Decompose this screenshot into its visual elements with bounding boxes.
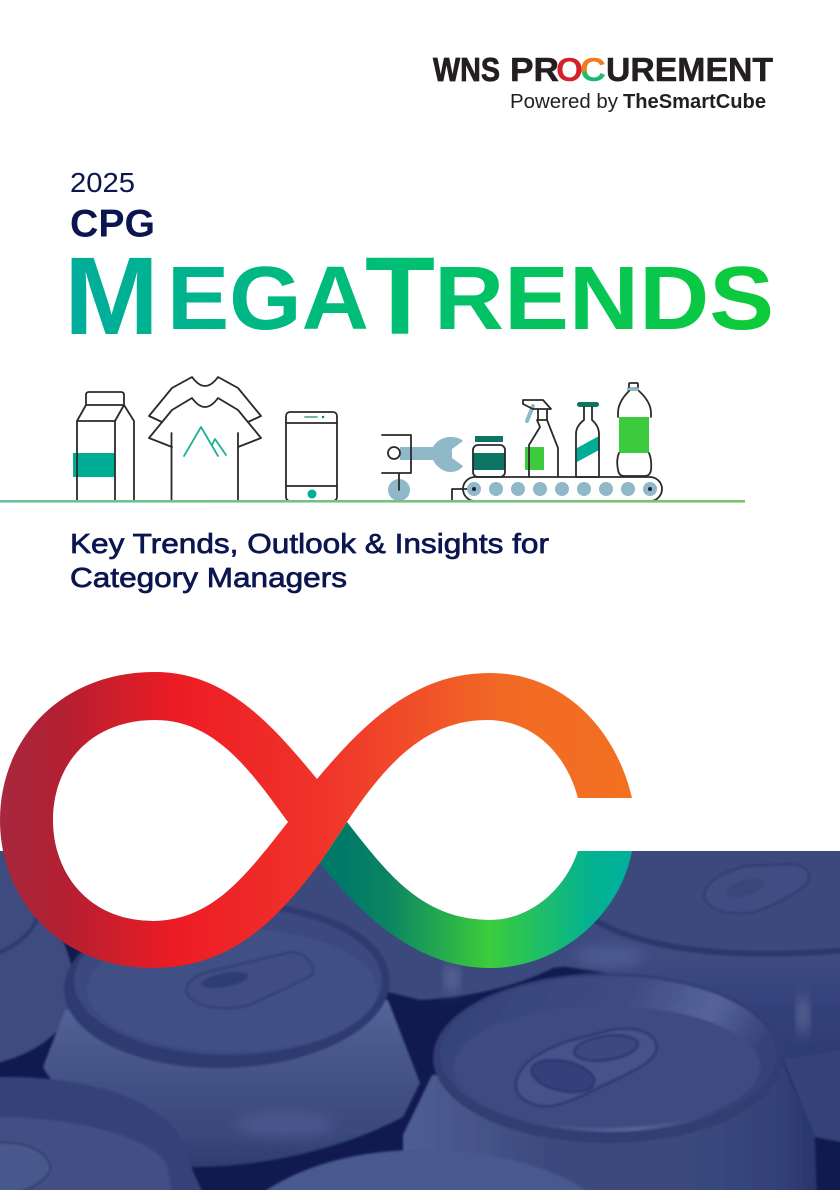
can: top right	[553, 845, 840, 1062]
subtitle: Key Trends, Outlook & Insights for	[70, 528, 549, 559]
heading: CPG: CPG	[70, 202, 155, 246]
icon: glass bottle	[576, 402, 599, 477]
title: MegaTrends: RENDS	[434, 249, 774, 349]
logo tagline: Powered by	[510, 91, 618, 113]
icon: conveyor belt	[452, 477, 662, 501]
ground line	[0, 500, 745, 503]
logo wordmark: WNS	[433, 51, 500, 88]
icon: smartphone	[286, 412, 337, 501]
icon: jar	[473, 436, 505, 477]
illustration: product line	[73, 377, 662, 501]
logo wordmark: C	[580, 51, 606, 88]
icon: t-shirts	[149, 377, 261, 500]
logo: WNS Procurement	[433, 51, 773, 113]
subtitle	[70, 528, 549, 593]
can: centre left	[43, 896, 420, 1167]
icon: milk carton	[73, 392, 134, 500]
icon: spray bottle	[523, 400, 558, 477]
logo tagline: TheSmartCube	[623, 91, 766, 113]
can: large front right	[403, 973, 817, 1190]
icon: plastic bottle	[617, 383, 651, 476]
logo wordmark	[433, 51, 773, 88]
background photo: aluminium cans	[0, 845, 840, 1190]
can: bottom left	[0, 1077, 205, 1190]
can: top left	[0, 845, 76, 1064]
can: bottom centre	[258, 1150, 595, 1190]
logo wordmark: O	[556, 51, 583, 88]
heading: year: 2025	[70, 167, 135, 198]
can: lower right edge	[783, 1049, 840, 1143]
white loop interiors	[53, 720, 632, 921]
title: MegaTrends: M	[64, 235, 159, 358]
can: back centre	[284, 851, 578, 1001]
icon: robot wrench arm	[382, 435, 463, 501]
title: MegaTrends: EGA	[167, 249, 369, 349]
green lower band	[320, 822, 632, 968]
title: MegaTrends: T	[365, 235, 435, 358]
title: MegaTrends	[64, 235, 774, 358]
logo wordmark: PR	[510, 51, 559, 88]
red and orange band	[0, 672, 632, 968]
logo wordmark: UREMENT	[606, 51, 773, 88]
infinity symbol	[0, 672, 632, 968]
subtitle: Category Managers	[70, 562, 347, 593]
